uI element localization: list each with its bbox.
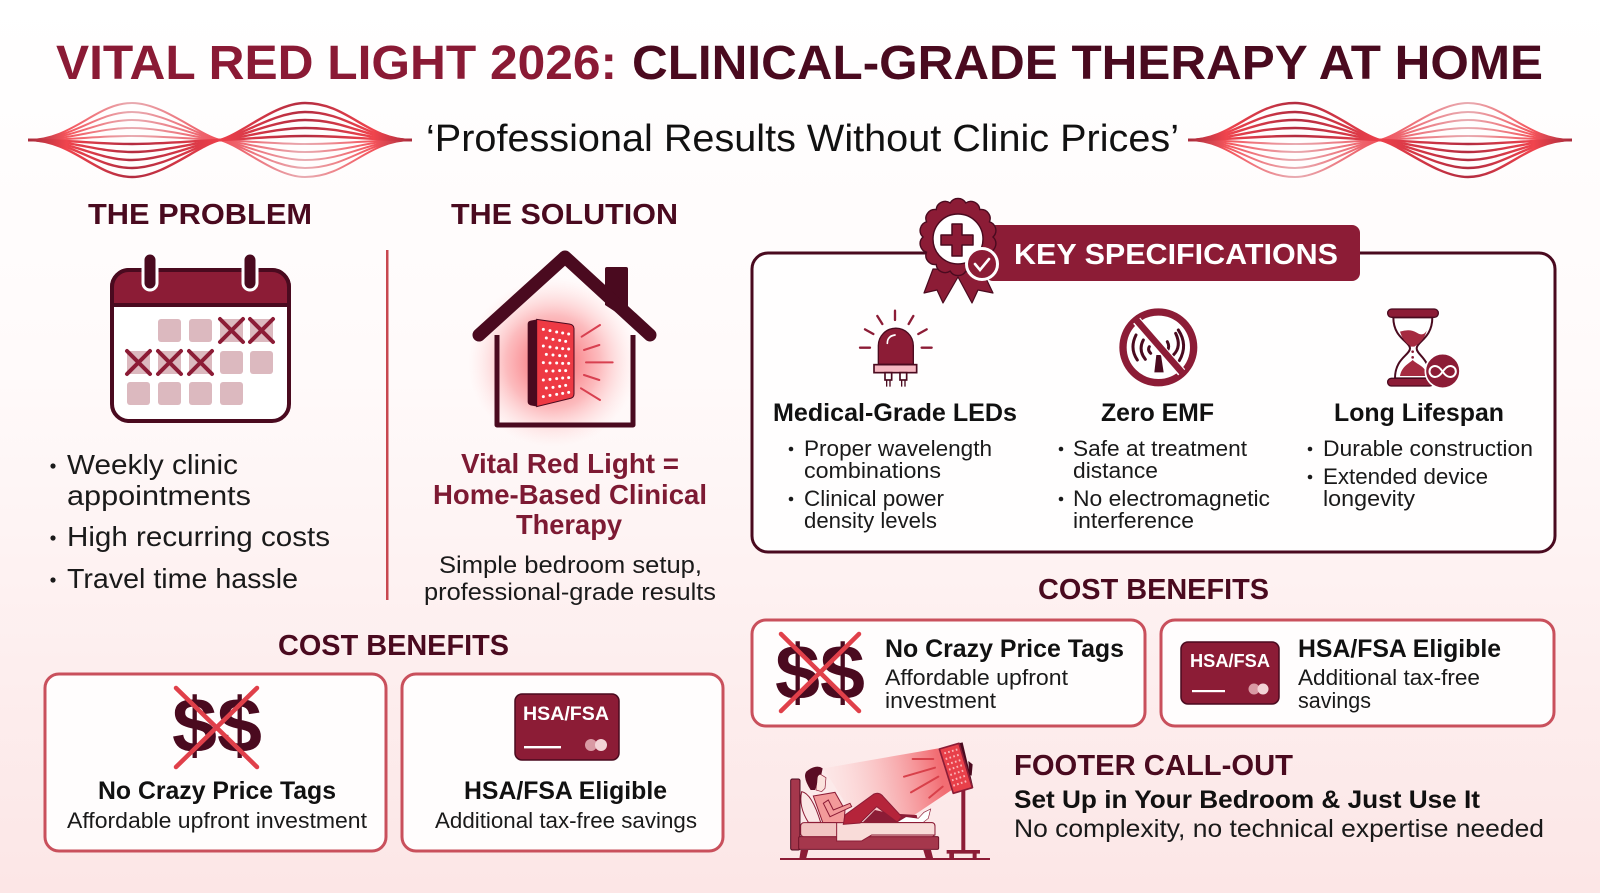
card: no crazy price tags (right): investment <box>885 688 996 713</box>
spec: medical-grade LEDs: Clinical power <box>804 486 944 511</box>
heading: cost benefits right: COST BENEFITS <box>1038 574 1269 606</box>
spec: zero EMF: interference <box>1073 508 1194 533</box>
spec: zero EMF <box>1059 399 1270 533</box>
spec: medical-grade LEDs: density levels <box>804 508 937 533</box>
card: hsa/fsa eligible (right): HSA/FSA <box>1190 651 1270 671</box>
solution text block: Vital Red Light = <box>461 448 679 479</box>
solution text block: professional-grade results <box>424 579 716 606</box>
card: hsa/fsa eligible (right): Additional tax-free <box>1298 665 1480 690</box>
card: no crazy price tags (left): No Crazy Price Tags <box>98 777 336 805</box>
solution text block: Home-Based Clinical <box>433 479 707 510</box>
card: hsa/fsa eligible (right): HSA/FSA Eligible <box>1298 635 1501 663</box>
problem bullet list: Travel time hassle <box>67 563 298 594</box>
footer call-out: No complexity, no technical expertise needed <box>1014 815 1544 843</box>
spec: long lifespan <box>1308 399 1533 511</box>
card: hsa/fsa eligible (left): HSA/FSA Eligible <box>464 777 667 805</box>
solution text block <box>424 448 716 606</box>
spec: long lifespan: Extended device <box>1323 464 1488 489</box>
card: no crazy price tags (right): $$ <box>775 628 865 716</box>
wave decoration left <box>28 103 412 177</box>
heading: the problem: THE PROBLEM <box>88 199 312 231</box>
heading: cost benefits left: COST BENEFITS <box>278 630 509 662</box>
card: hsa/fsa eligible (right) <box>1161 620 1554 726</box>
footer call-out: Set Up in Your Bedroom & Just Use It <box>1014 786 1481 814</box>
illustration: person in bed under red light <box>780 742 990 859</box>
footer call-out: FOOTER CALL-OUT <box>1014 750 1293 782</box>
spec: long lifespan: Durable construction <box>1323 436 1533 461</box>
spec: zero EMF: No electromagnetic <box>1073 486 1270 511</box>
card: no crazy price tags (left): $$ <box>172 681 262 769</box>
banner: key specifications: KEY SPECIFICATIONS <box>1014 239 1338 271</box>
icon: house with red light panel <box>468 257 650 447</box>
problem bullet list: appointments <box>67 480 251 511</box>
footer call-out <box>1014 750 1544 843</box>
card: no crazy price tags (right) <box>752 620 1145 726</box>
problem bullet list: Weekly clinic <box>67 449 238 480</box>
icon: rosette badge <box>920 198 998 303</box>
card: hsa/fsa eligible (left): HSA/FSA <box>523 704 609 725</box>
banner: key specifications <box>985 225 1360 281</box>
card: no crazy price tags (left) <box>45 674 386 851</box>
spec: medical-grade LEDs <box>773 399 1017 533</box>
spec: zero EMF: Safe at treatment <box>1073 436 1247 461</box>
title <box>56 37 1543 90</box>
card: hsa/fsa eligible (left) <box>402 674 723 851</box>
card: hsa/fsa eligible (right): savings <box>1298 688 1371 713</box>
title: VITAL RED LIGHT 2026: <box>56 37 617 90</box>
card: hsa/fsa eligible (left): Additional tax-free savings <box>435 808 697 833</box>
spec: zero EMF: Zero EMF <box>1101 399 1214 427</box>
problem bullet list: High recurring costs <box>67 521 330 552</box>
spec: medical-grade LEDs: Medical-Grade LEDs <box>773 399 1017 427</box>
title: CLINICAL-GRADE THERAPY AT HOME <box>632 37 1543 90</box>
wave decoration right <box>1188 103 1572 177</box>
card: no crazy price tags (right): Affordable upfront <box>885 665 1068 690</box>
panel: key specifications <box>752 198 1555 552</box>
spec: zero EMF: distance <box>1073 458 1158 483</box>
spec: medical-grade LEDs: combinations <box>804 458 941 483</box>
icon: zero EMF <box>1123 312 1194 383</box>
solution text block: Therapy <box>516 509 622 540</box>
card: no crazy price tags (left): Affordable upfront investment <box>67 808 367 833</box>
problem bullet list <box>50 449 330 594</box>
icon: calendar <box>112 253 289 421</box>
heading: the solution: THE SOLUTION <box>451 199 678 231</box>
solution text block: Simple bedroom setup, <box>439 552 702 579</box>
icon: LED <box>860 311 932 387</box>
spec: long lifespan: longevity <box>1323 486 1415 511</box>
icon: hourglass with infinity <box>1388 309 1460 388</box>
spec: long lifespan: Long Lifespan <box>1334 399 1504 427</box>
subtitle: ‘Professional Results Without Clinic Prices’ <box>426 118 1179 160</box>
spec: medical-grade LEDs: Proper wavelength <box>804 436 992 461</box>
card: no crazy price tags (right): No Crazy Price Tags <box>885 635 1124 663</box>
